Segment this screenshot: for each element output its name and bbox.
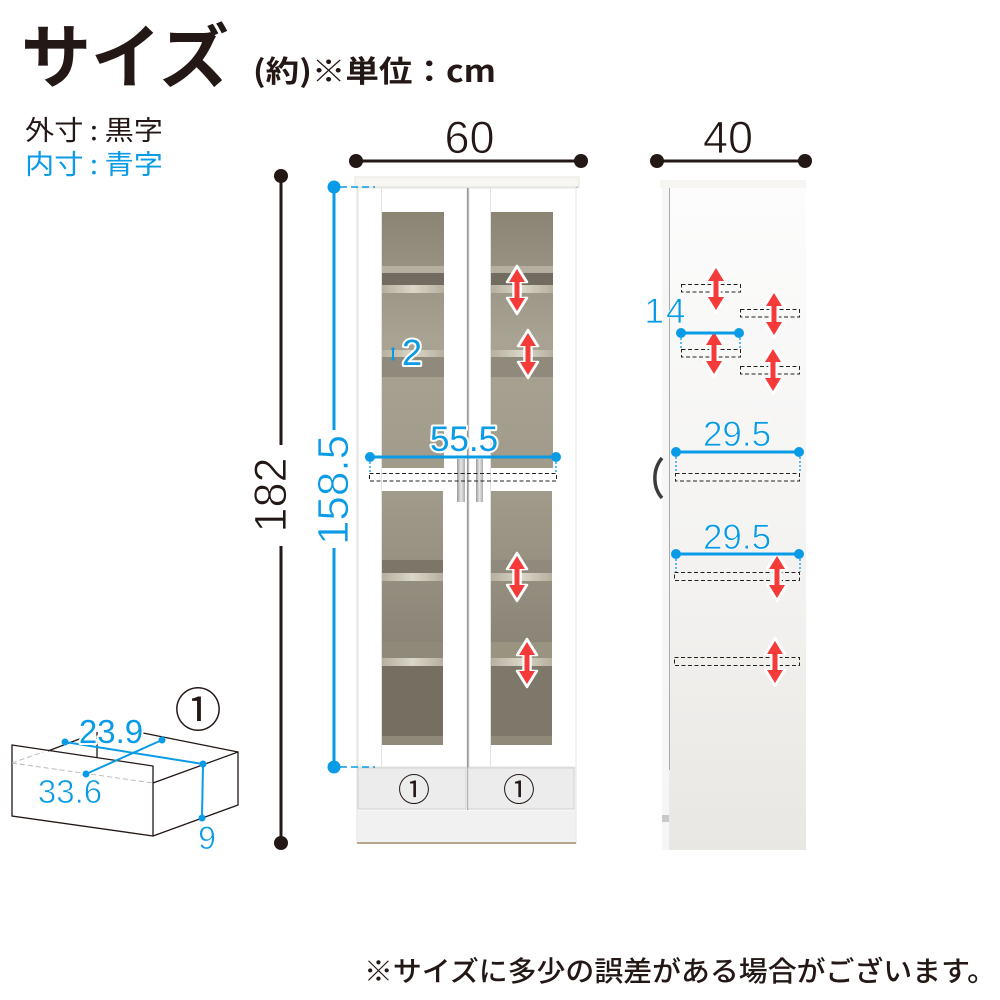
depth dimension 29.5 lower — [671, 518, 804, 572]
drawer diagram — [12, 672, 238, 856]
cabinet side view — [655, 180, 806, 850]
left drawer — [358, 768, 466, 809]
shelf adjust arrow 3 — [507, 553, 527, 601]
unit note: (約)※単位：cm — [253, 47, 496, 91]
door edge — [662, 188, 669, 850]
shelf depth dimension 14 — [645, 292, 744, 349]
lower right glass — [491, 491, 552, 745]
side adjust arrow 1 — [706, 265, 726, 313]
value 33.6: 33.6 — [38, 773, 102, 810]
door handles — [457, 459, 483, 502]
shelf depth dimension 14: 14 — [645, 292, 687, 331]
side adjust arrow 2 — [764, 290, 784, 338]
height dimension 182: 182 — [245, 457, 296, 533]
door frame lines — [382, 188, 490, 767]
drawer outline — [12, 732, 238, 836]
depth dimension 40 — [650, 112, 812, 168]
inner height line — [198, 764, 206, 822]
depth dimension 29.5 upper — [671, 415, 804, 473]
drawer label: ① — [174, 672, 222, 741]
side adjust arrow 4 — [763, 346, 783, 394]
inner height dimension 158.5 — [309, 180, 375, 774]
legend: inner dimension: 内寸 : 青字 — [25, 143, 163, 182]
depth dimension 29.5 upper: 29.5 — [703, 415, 771, 454]
legend: outer dimension: 外寸 : 黒字 — [25, 109, 163, 148]
inner width dimension 55.5: 55.5 — [430, 420, 498, 459]
inner height dimension 158.5: 158.5 — [309, 435, 358, 545]
side handle — [655, 458, 662, 498]
inner depth line — [82, 736, 166, 778]
side dashed shelves — [674, 284, 800, 666]
value 9: 9 — [198, 820, 216, 856]
upper left glass — [382, 212, 444, 468]
width dimension 60: 60 — [444, 112, 495, 163]
side adjust arrow 5 — [767, 553, 787, 601]
shelf thickness 2: 2 — [402, 332, 422, 373]
side top board — [660, 180, 806, 188]
height dimension 182 — [245, 169, 296, 850]
right drawer — [468, 768, 574, 809]
right door — [469, 188, 576, 767]
side adjust arrow 3 — [704, 329, 724, 377]
inner width line — [62, 738, 206, 768]
side adjust arrow 6 — [765, 638, 785, 686]
cabinet front view — [355, 177, 579, 844]
depth dimension 40: 40 — [703, 112, 753, 163]
left drawer number: ① — [398, 765, 430, 811]
lower left glass — [382, 491, 443, 745]
shelf adjust arrow 4 — [517, 639, 537, 687]
side panel — [669, 188, 806, 850]
title: サイズ — [21, 2, 229, 103]
shelf thickness 2 — [391, 332, 422, 373]
shelf adjust arrow 1 — [507, 266, 527, 314]
inner width dimension 55.5 — [365, 420, 561, 481]
plinth — [358, 811, 575, 842]
upper right glass — [491, 212, 553, 468]
value 23.9: 23.9 — [79, 713, 143, 750]
left door — [358, 188, 467, 767]
width dimension 60 — [349, 112, 588, 168]
right drawer number: ① — [503, 765, 535, 811]
shelf adjust arrow 2 — [518, 330, 538, 378]
cabinet body — [357, 187, 576, 843]
depth dimension 29.5 lower: 29.5 — [703, 518, 771, 557]
top board — [355, 177, 579, 187]
footnote: ※サイズに多少の誤差がある場合がございます。 — [364, 950, 996, 990]
